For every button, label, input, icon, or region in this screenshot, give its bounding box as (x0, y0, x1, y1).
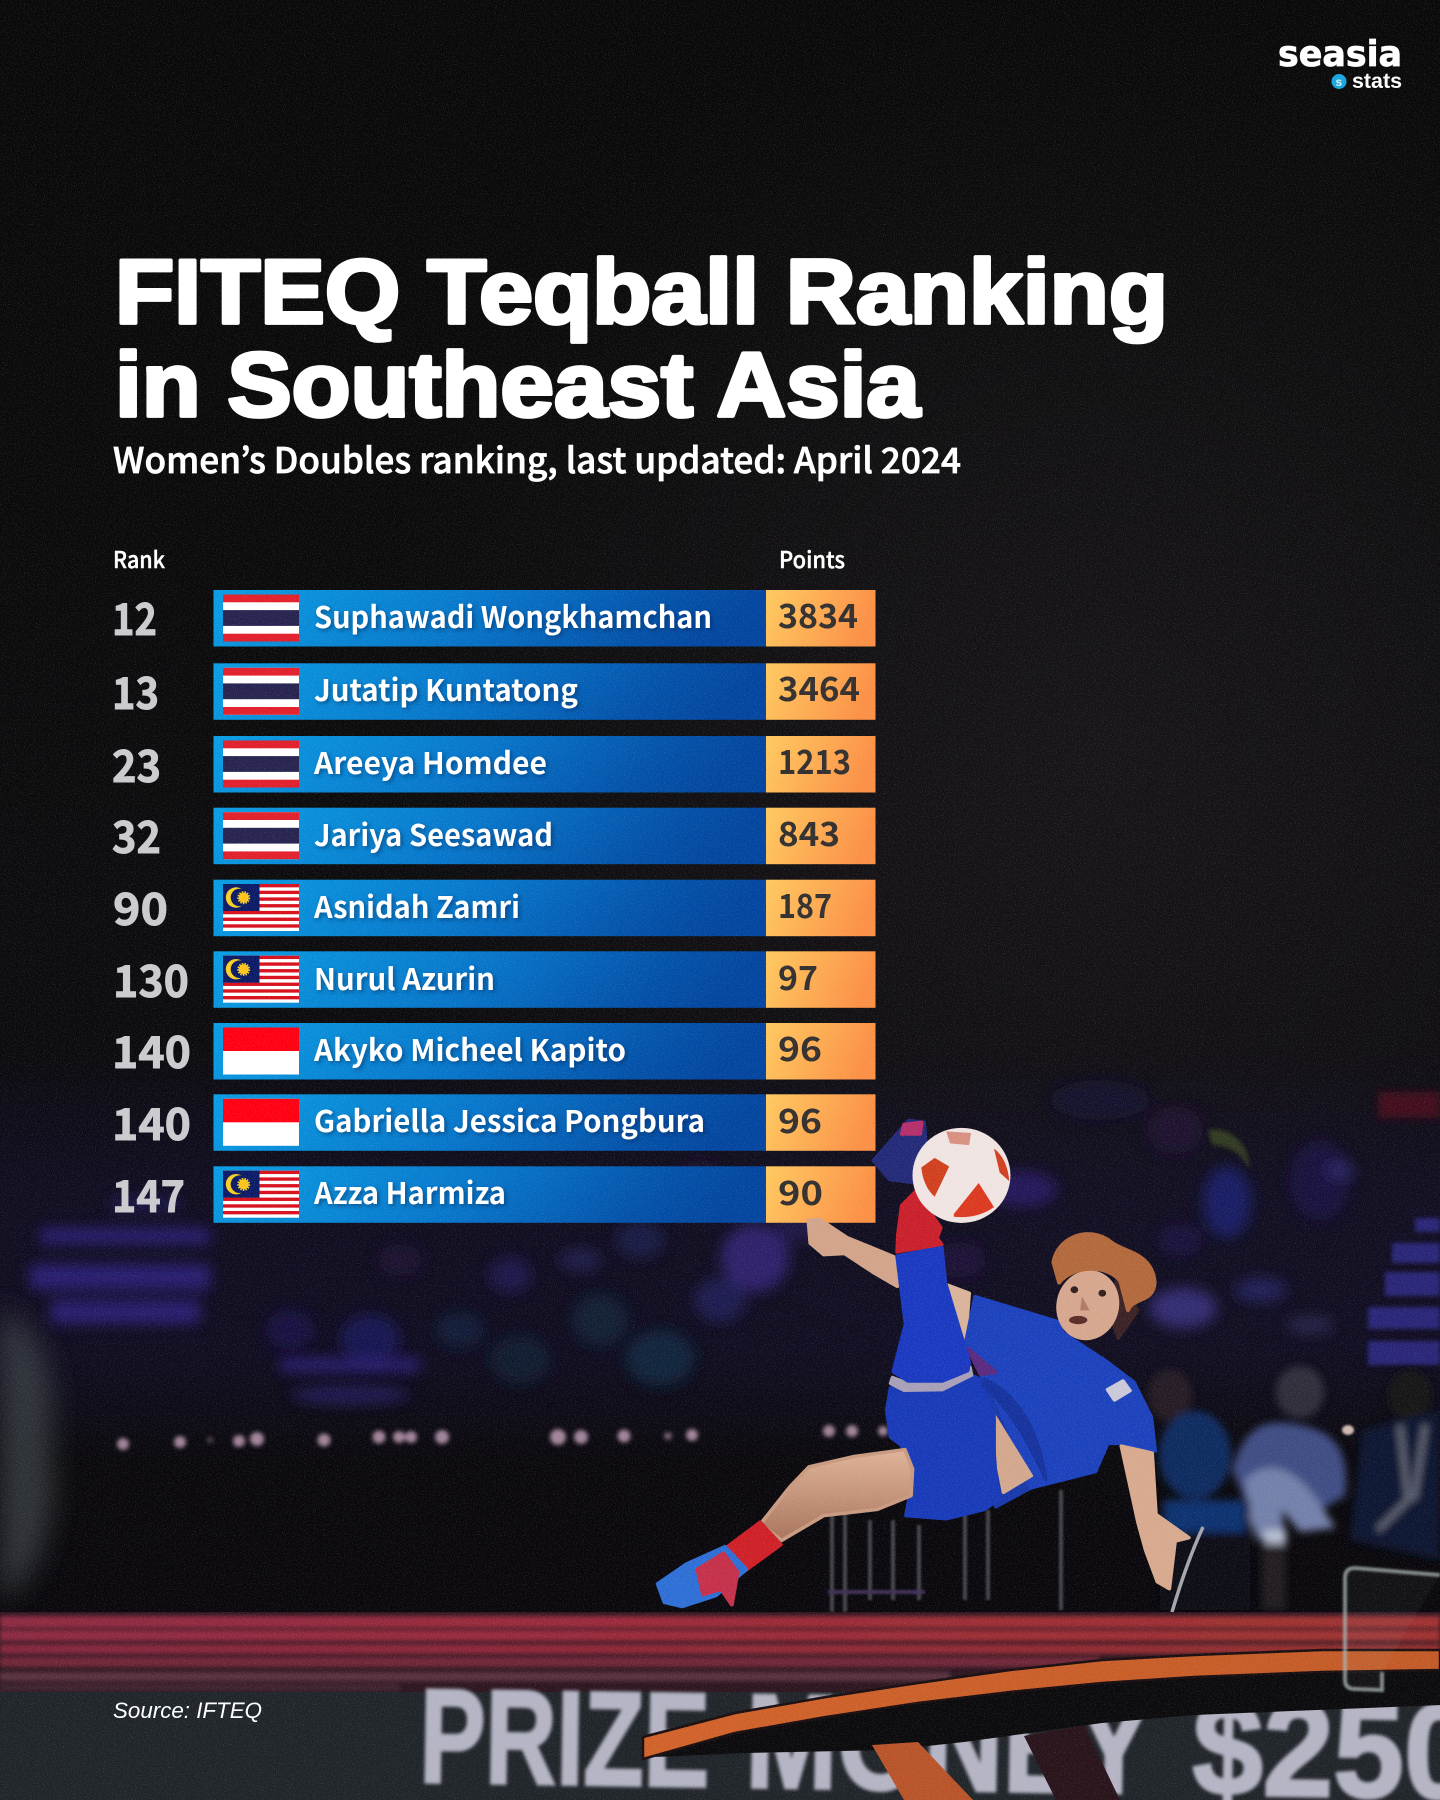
stands: purple stripes right (1368, 1218, 1440, 1365)
row: rank 23: 23 (112, 731, 161, 795)
banner text (419, 1662, 1440, 1800)
lights row (117, 1425, 888, 1450)
row: rank 23: 1213 (778, 736, 851, 784)
row: rank 90: 90 (113, 874, 168, 938)
purple jersey shadow (968, 1348, 996, 1374)
row: rank 147 (112, 1161, 876, 1225)
stands: purple stripes left (30, 1198, 420, 1372)
jersey (966, 1297, 1155, 1488)
logo: s (1336, 75, 1342, 89)
orange top (643, 1650, 1440, 1759)
row: rank 32: Jariya Seesawad (314, 811, 553, 855)
subtitle: Women’s Doubles ranking, last updated: April 2024 (113, 433, 961, 484)
row: rank 13 (112, 658, 876, 722)
row: rank 147: 90 (778, 1167, 823, 1215)
row: rank 12: 3834 (778, 590, 858, 638)
red track band (0, 1612, 1440, 1694)
row: rank 130: Nurul Azurin (314, 955, 495, 999)
face (1051, 1267, 1124, 1344)
row: rank 147: 147 (112, 1161, 185, 1225)
knee band (891, 1367, 971, 1390)
row: rank 90: Asnidah Zamri (313, 883, 520, 927)
lower shoe (658, 1547, 746, 1607)
dark leg (1024, 1725, 1120, 1800)
lower thigh (761, 1450, 912, 1540)
row: rank 13: 13 (112, 658, 159, 722)
crowd (0, 1040, 1440, 1610)
ranking table (112, 584, 876, 1225)
row: rank 23: Areeya Homdee (313, 739, 547, 783)
jersey fold (984, 1379, 1046, 1479)
row: rank 130 (113, 946, 876, 1010)
row: rank 140 second: 140 (112, 1089, 191, 1153)
logo: stats (1352, 70, 1402, 93)
source: Source: IFTEQ (113, 1698, 262, 1723)
raised leg sleeve (893, 1247, 969, 1381)
logo (1278, 34, 1402, 93)
belly (995, 1417, 1031, 1492)
table underside (655, 1670, 1440, 1757)
banner floor (0, 1692, 1440, 1800)
left haze (0, 1310, 53, 1600)
jersey badge (1108, 1381, 1130, 1400)
logo: seasia (1278, 34, 1402, 75)
back arm (808, 1219, 897, 1286)
shorts (887, 1378, 999, 1519)
row: rank 147: Azza Harmiza (313, 1169, 506, 1213)
row: rank 13: 3464 (778, 663, 860, 711)
row: rank 32: 32 (112, 802, 161, 866)
row: rank 140: Akyko Micheel Kapito (313, 1026, 626, 1070)
row: rank 32 (112, 802, 876, 866)
title: in Southeast Asia (115, 335, 921, 436)
row: rank 130: 97 (778, 952, 818, 1000)
lower sock (721, 1522, 781, 1571)
row: rank 140 second (112, 1089, 876, 1153)
red sign in stands (1378, 1092, 1440, 1118)
title (115, 242, 1168, 436)
title: FITEQ Teqball Ranking (115, 242, 1168, 343)
player (658, 1120, 1189, 1607)
hair (1053, 1234, 1155, 1310)
column header: rank: Rank (113, 541, 165, 575)
raised shoe (873, 1120, 926, 1182)
row: rank 90 (113, 874, 876, 938)
row: rank 12: 12 (112, 584, 157, 648)
torso backing (973, 1376, 1034, 1507)
row: rank 140: 140 (112, 1017, 191, 1081)
orange leg (872, 1742, 973, 1800)
row: rank 140 second: Gabriella Jessica Pongbura (314, 1097, 705, 1141)
row: rank 13: Jutatip Kuntatong (314, 666, 578, 710)
raised thigh skin (946, 1285, 969, 1372)
teqball table (643, 1650, 1440, 1800)
row: rank 12 (112, 584, 876, 648)
spectator hat (1208, 1129, 1250, 1170)
row: rank 90: 187 (778, 880, 832, 928)
racket line near hand (1172, 1527, 1203, 1612)
row: rank 12: Suphawadi Wongkhamchan (314, 593, 712, 637)
row: rank 140 second: 96 (778, 1095, 822, 1143)
ball (912, 1128, 1010, 1223)
front arm (1121, 1446, 1189, 1589)
row: rank 130: 130 (113, 946, 189, 1010)
column header: points: Points (779, 541, 845, 575)
seated spectators (1148, 1366, 1440, 1610)
glass net (1345, 1568, 1440, 1690)
row: rank 140 (112, 1017, 876, 1081)
row: rank 140: 96 (778, 1023, 822, 1071)
barrier behind player (828, 1490, 1061, 1612)
raised sock (897, 1192, 942, 1252)
row: rank 23 (112, 731, 876, 795)
row: rank 32: 843 (778, 808, 840, 856)
hair back (1109, 1276, 1138, 1338)
